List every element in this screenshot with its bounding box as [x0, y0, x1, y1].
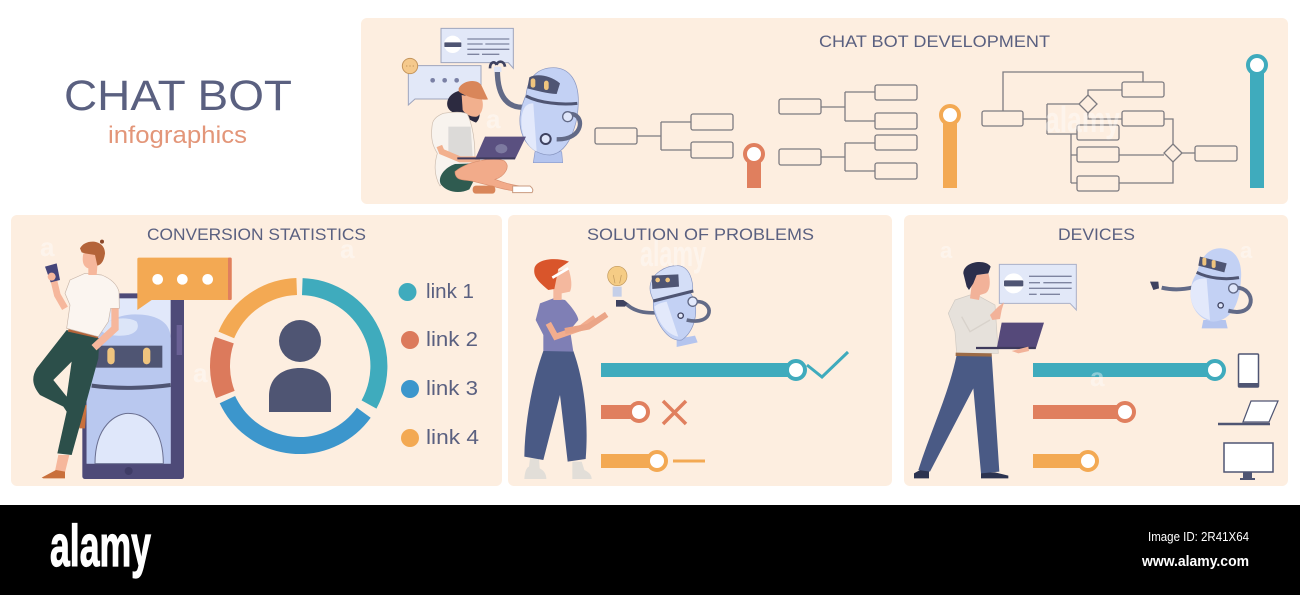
robot [490, 62, 580, 163]
heading: solution of problems: SOLUTION OF PROBLEMS [587, 225, 814, 244]
donut chart [220, 286, 379, 446]
icon: dash [673, 460, 705, 462]
icon: light bulb [608, 266, 627, 297]
panel: solution of problems [508, 215, 892, 486]
watermark letters: alamy [1045, 99, 1120, 140]
progress bar: long teal with check [601, 352, 848, 379]
progress bar: short orange [1033, 452, 1097, 470]
legend: link 3: link 3 [426, 378, 478, 400]
icon: cross [663, 401, 686, 424]
footer logo: alamy [50, 514, 151, 579]
woman [432, 81, 533, 194]
icon: check mark [807, 352, 848, 377]
speech bubble with text lines [441, 28, 513, 68]
legend: link 1: link 1 [426, 281, 474, 303]
footer strip [0, 505, 1300, 595]
watermark letters: a [940, 238, 953, 263]
watermark letters [40, 99, 1253, 392]
icon: tablet [1238, 354, 1258, 387]
heading: devices: DEVICES [1058, 225, 1135, 244]
woman [524, 259, 607, 479]
website: www.alamy.com [1141, 553, 1249, 570]
speech bubble [999, 264, 1076, 310]
robot [1150, 248, 1251, 328]
legend: link 4: link 4 [426, 427, 479, 449]
marker: teal pin [1248, 56, 1266, 188]
illustration: woman with laptop and robot [402, 28, 580, 194]
illustration: man with laptop and robot [914, 248, 1251, 478]
legend: link 2: link 2 [426, 329, 478, 351]
watermark letters: a [193, 358, 208, 388]
flowchart: complex with decisions [982, 72, 1237, 191]
flowchart: simple tree [595, 114, 733, 158]
progress bar: long teal [1033, 361, 1224, 379]
title: CHAT BOT [64, 72, 292, 120]
panel: conversion statistics [11, 215, 502, 486]
smartphone with robot [82, 293, 184, 479]
progress bar: short coral with cross [601, 401, 686, 424]
progress bar: medium orange with dash [601, 452, 705, 470]
man [914, 262, 1044, 478]
marker: orange pin [941, 106, 959, 188]
watermark letters: a [486, 104, 501, 134]
watermark letters: alamy [640, 233, 706, 274]
icon: laptop [1218, 401, 1278, 424]
man with phone [33, 240, 119, 478]
watermark letters: a [40, 232, 55, 262]
subtitle: infographics [108, 122, 247, 149]
icon: user [269, 320, 331, 412]
legend: link 4 [401, 427, 479, 449]
panel: devices [904, 215, 1288, 486]
illustration: man leaning on phone [33, 240, 232, 479]
icon: desktop monitor [1224, 443, 1273, 480]
progress bar: medium coral [1033, 403, 1134, 421]
speech bubble with dots [402, 58, 481, 105]
flowchart: double tree [779, 85, 917, 179]
heading: chat bot development: CHAT BOT DEVELOPMENT [819, 32, 1050, 51]
marker: coral pin [745, 145, 763, 188]
legend: link 1 [398, 281, 474, 303]
orange chat bubble [137, 258, 232, 310]
watermark letters: a [1240, 238, 1253, 263]
watermark letters: a [1090, 362, 1105, 392]
title [64, 72, 292, 149]
illustration: woman, bulb and robot [524, 259, 709, 479]
panel: chat bot development [361, 18, 1288, 204]
robot [616, 266, 709, 347]
legend: link 3 [401, 378, 478, 400]
heading: conversion statistics: CONVERSION STATISTICS [147, 225, 366, 244]
image id: Image ID: 2R41X64 [1148, 529, 1249, 544]
watermark letters: a [340, 234, 355, 264]
legend: link 2 [401, 329, 478, 351]
